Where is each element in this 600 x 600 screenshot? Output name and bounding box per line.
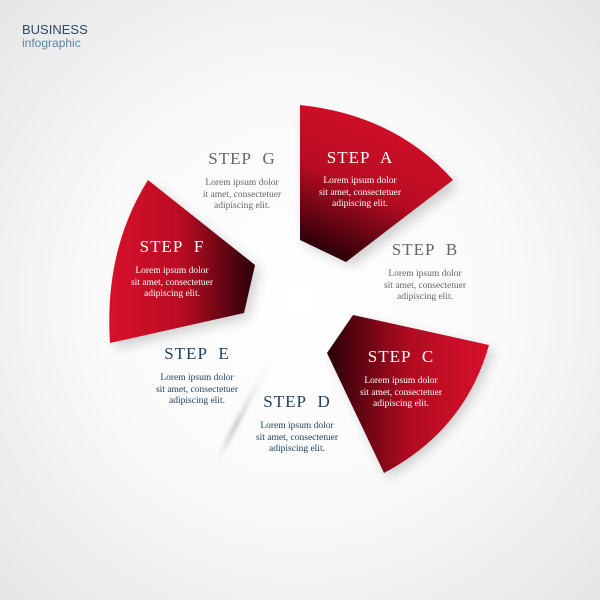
shadows — [305, 112, 458, 266]
step B text: Lorem ipsum dolor — [388, 269, 462, 279]
step G text: adipiscing elit. — [214, 201, 270, 211]
step E text: sit amet, consectetuer — [156, 384, 238, 394]
step C text: STEP C — [368, 347, 434, 366]
step F text: sit amet, consectetuer — [131, 278, 213, 288]
step F text — [131, 237, 213, 299]
step G text — [203, 149, 282, 211]
step D text: STEP D — [263, 392, 331, 411]
step F text: STEP F — [140, 237, 204, 256]
step B text — [384, 240, 466, 302]
step B text: STEP B — [392, 240, 458, 259]
step G text: Lorem ipsum dolor — [205, 178, 279, 188]
title: BUSINESS — [22, 22, 88, 37]
segment: step F — [109, 180, 255, 343]
step G text: it amet, consectetuer — [203, 190, 281, 200]
step C text: adipiscing elit. — [373, 399, 429, 409]
step C text: sit amet, consectetuer — [360, 388, 442, 398]
step G text: STEP G — [208, 149, 276, 168]
step B text: sit amet, consectetuer — [384, 280, 466, 290]
title: infographic — [22, 36, 81, 50]
step D text: sit amet, consectetuer — [256, 432, 338, 442]
step E text: Lorem ipsum dolor — [160, 373, 234, 383]
step E text: STEP E — [164, 344, 230, 363]
step E text: adipiscing elit. — [169, 396, 225, 406]
step C text: Lorem ipsum dolor — [364, 376, 438, 386]
step C text — [360, 347, 442, 409]
step B text: adipiscing elit. — [397, 292, 453, 302]
step F text: Lorem ipsum dolor — [135, 266, 209, 276]
step F text: adipiscing elit. — [144, 289, 200, 299]
step A text: sit amet, consectetuer — [319, 188, 401, 198]
segment: step C — [327, 315, 489, 473]
step A text: STEP A — [327, 148, 393, 167]
step D text: Lorem ipsum dolor — [260, 421, 334, 431]
step A text: Lorem ipsum dolor — [323, 176, 397, 186]
step E text — [156, 344, 238, 406]
step D text — [256, 392, 338, 454]
step A text — [319, 148, 401, 209]
segment: step A — [300, 105, 453, 262]
title — [22, 22, 88, 50]
step D text: adipiscing elit. — [269, 444, 325, 454]
step A text: adipiscing elit. — [332, 199, 388, 209]
